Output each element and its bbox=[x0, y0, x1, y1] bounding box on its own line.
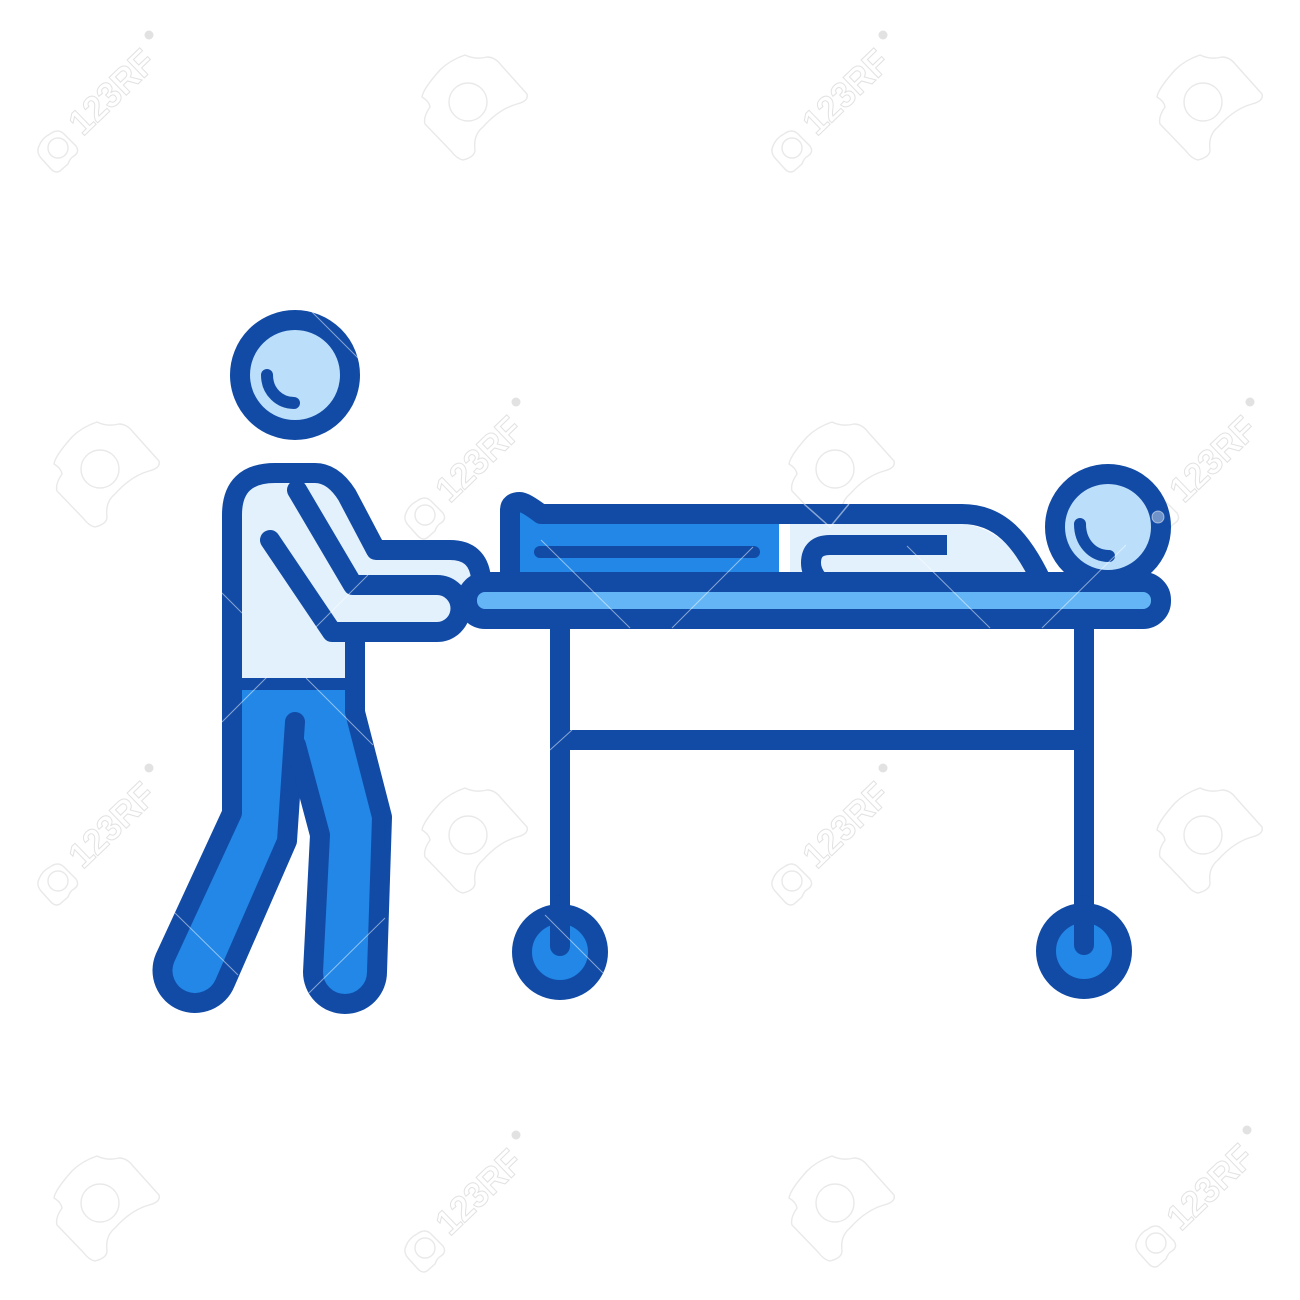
patient blanket: lower body bbox=[519, 510, 779, 574]
icon: person pushing stretcher bbox=[162, 320, 1161, 1004]
blanket fold line bbox=[540, 546, 754, 558]
watermark traces over icon bbox=[175, 312, 1164, 993]
patient arm line bbox=[811, 545, 947, 580]
patient blanket: upper body bbox=[790, 524, 1030, 574]
stretcher bed bbox=[467, 582, 1161, 619]
wheel right bbox=[1046, 905, 1122, 989]
wheel left bbox=[522, 905, 598, 990]
stretcher legs and crossbar bbox=[560, 628, 1084, 905]
person shirt and arms bbox=[232, 473, 481, 690]
patient head bbox=[1055, 474, 1161, 580]
person head bbox=[240, 320, 350, 430]
person trousers bbox=[162, 684, 382, 1004]
blanket outline bbox=[510, 502, 1042, 582]
